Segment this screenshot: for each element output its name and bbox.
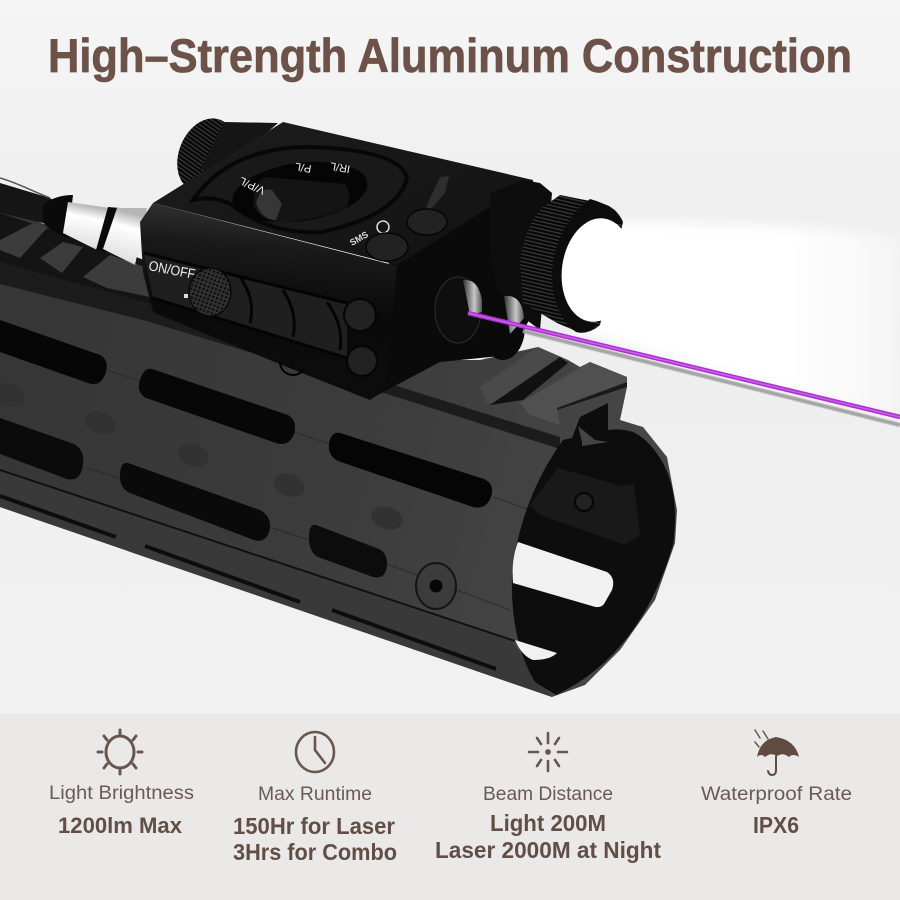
side panel recess <box>144 253 347 358</box>
label: Beam Distance <box>483 784 613 805</box>
icon: umbrella <box>755 730 799 775</box>
laser device <box>140 122 540 400</box>
flashlight barrel <box>490 180 552 330</box>
grey laser reflection <box>523 331 900 425</box>
ridge line <box>0 470 515 641</box>
rail teeth left <box>0 223 150 297</box>
light beam <box>575 222 900 420</box>
flashlight <box>490 180 639 333</box>
bezel rim <box>552 199 623 333</box>
purple laser beam <box>468 313 900 417</box>
knurled bezel <box>520 195 623 332</box>
slot lower centre <box>120 463 270 541</box>
white slot upper <box>513 542 613 607</box>
silver nut <box>103 208 147 265</box>
spec: beam distance <box>435 733 661 863</box>
spec: max runtime <box>233 732 397 865</box>
glowing lens <box>555 214 639 326</box>
dial ring <box>193 147 407 232</box>
label: Waterproof Rate <box>701 784 852 805</box>
slot upper centre <box>139 369 295 444</box>
white slot lower <box>515 640 557 660</box>
dial labels <box>238 159 351 196</box>
slot far left upper <box>0 320 107 384</box>
hex screw <box>416 563 456 609</box>
slot far left lower <box>0 418 83 479</box>
brand mark <box>348 221 389 248</box>
value line 2: 3Hrs for Combo <box>233 839 397 865</box>
connector <box>43 195 147 265</box>
inner barrel opening <box>512 403 675 695</box>
value: 150Hr for Laser <box>233 813 395 839</box>
slot small <box>309 525 387 578</box>
value: 1200lm Max <box>58 813 183 838</box>
rubber boot <box>43 195 73 238</box>
device foot <box>153 300 400 400</box>
laser emitters <box>435 277 525 360</box>
top screws <box>366 209 447 261</box>
rail end tooth A <box>480 347 568 403</box>
icon: clock <box>296 732 334 772</box>
label: Max Runtime <box>258 784 372 805</box>
spec: light brightness <box>49 730 194 838</box>
inner strut <box>578 426 608 446</box>
dark rail base band <box>0 260 560 449</box>
black ring <box>96 207 120 252</box>
on off label: ON/OFF <box>147 257 197 282</box>
dark rail gap <box>0 213 155 305</box>
value: Light 200M <box>490 810 606 836</box>
icon: sun <box>98 730 142 774</box>
lower band <box>0 470 552 697</box>
front face <box>372 180 540 398</box>
bottom edge slits <box>0 496 496 669</box>
foot circle <box>280 349 306 375</box>
background <box>0 0 900 714</box>
brand mark: SMS <box>348 229 370 248</box>
rear knurled knob <box>167 110 278 200</box>
slot upper right <box>329 433 492 508</box>
dial window <box>229 154 371 230</box>
rail end tooth B <box>520 362 627 425</box>
dial labels: IR/L <box>329 159 351 175</box>
rail tooth gap <box>490 357 568 405</box>
side panel grooves <box>144 253 347 358</box>
power button <box>189 268 231 316</box>
knob highlight <box>256 189 282 220</box>
cable <box>0 178 60 228</box>
top face <box>153 122 533 265</box>
icon: starburst <box>529 733 567 771</box>
inner screw <box>575 493 593 511</box>
selector knob <box>253 177 349 222</box>
adjuster slot <box>426 176 449 210</box>
inner mount block <box>530 468 640 545</box>
spec: waterproof rate <box>701 730 852 838</box>
machining lines <box>83 370 530 610</box>
handguard <box>0 213 677 697</box>
value: IPX6 <box>753 812 799 838</box>
rail top stripe <box>557 382 627 410</box>
machined bumps <box>0 380 406 533</box>
side face <box>140 203 397 398</box>
handguard body <box>0 213 677 697</box>
silver collar <box>63 202 110 250</box>
label: Light Brightness <box>49 783 194 804</box>
dial labels: V/P/L <box>238 174 267 196</box>
title: High–Strength Aluminum Construction <box>48 29 852 82</box>
indicator dot <box>184 294 188 298</box>
dial labels: P/L <box>294 160 312 174</box>
spec band <box>0 714 900 900</box>
side screws <box>344 299 377 376</box>
value line 2: Laser 2000M at Night <box>435 837 661 863</box>
